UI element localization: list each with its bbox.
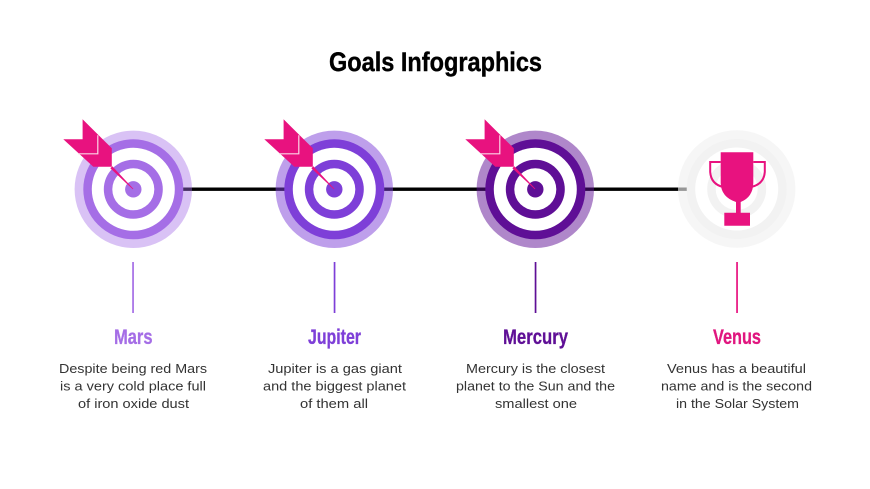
connector line: Mercury bbox=[535, 262, 536, 313]
panel: Jupiter bbox=[263, 119, 406, 411]
text: Mars description: is a very cold place full bbox=[60, 378, 206, 394]
text: Venus description: Venus has a beautiful bbox=[667, 361, 806, 376]
heading: Mars: Mars bbox=[114, 326, 152, 349]
panel: Mars bbox=[59, 119, 207, 411]
text: Mercury description: Mercury is the closest bbox=[466, 361, 605, 376]
connector line: Mars bbox=[132, 262, 134, 313]
timeline connector bbox=[183, 188, 687, 191]
icon: faded target bbox=[678, 130, 795, 248]
text: Jupiter description bbox=[263, 361, 406, 411]
text: Mercury description bbox=[456, 361, 615, 411]
text: Mercury description: planet to the Sun and the bbox=[456, 378, 615, 394]
text: Jupiter description: Jupiter is a gas giant bbox=[268, 361, 402, 376]
connector line: Venus bbox=[736, 262, 738, 313]
text: Venus description bbox=[661, 361, 812, 411]
text: Jupiter description: of them all bbox=[300, 396, 368, 411]
text: Mars description: of iron oxide dust bbox=[78, 396, 189, 411]
title: Goals Infographics bbox=[329, 47, 542, 77]
panel: Venus bbox=[661, 130, 812, 411]
text: Mercury description: smallest one bbox=[495, 396, 577, 411]
text: Jupiter description: and the biggest planet bbox=[263, 378, 406, 394]
icon: trophy bbox=[710, 152, 765, 226]
panel: Mercury bbox=[456, 119, 615, 411]
icon: Mercury target with arrow bbox=[465, 119, 594, 248]
icon: Mars target with arrow bbox=[63, 119, 192, 248]
text: Mars description: Despite being red Mars bbox=[59, 361, 207, 376]
text: Venus description: in the Solar System bbox=[676, 396, 799, 411]
icon: Jupiter target with arrow bbox=[264, 119, 393, 248]
connector line: Jupiter bbox=[334, 262, 335, 313]
heading: Jupiter: Jupiter bbox=[308, 326, 361, 349]
heading: Mercury: Mercury bbox=[503, 326, 568, 349]
text: Mars description bbox=[59, 361, 207, 411]
heading: Venus: Venus bbox=[713, 326, 761, 349]
text: Venus description: name and is the second bbox=[661, 378, 812, 394]
